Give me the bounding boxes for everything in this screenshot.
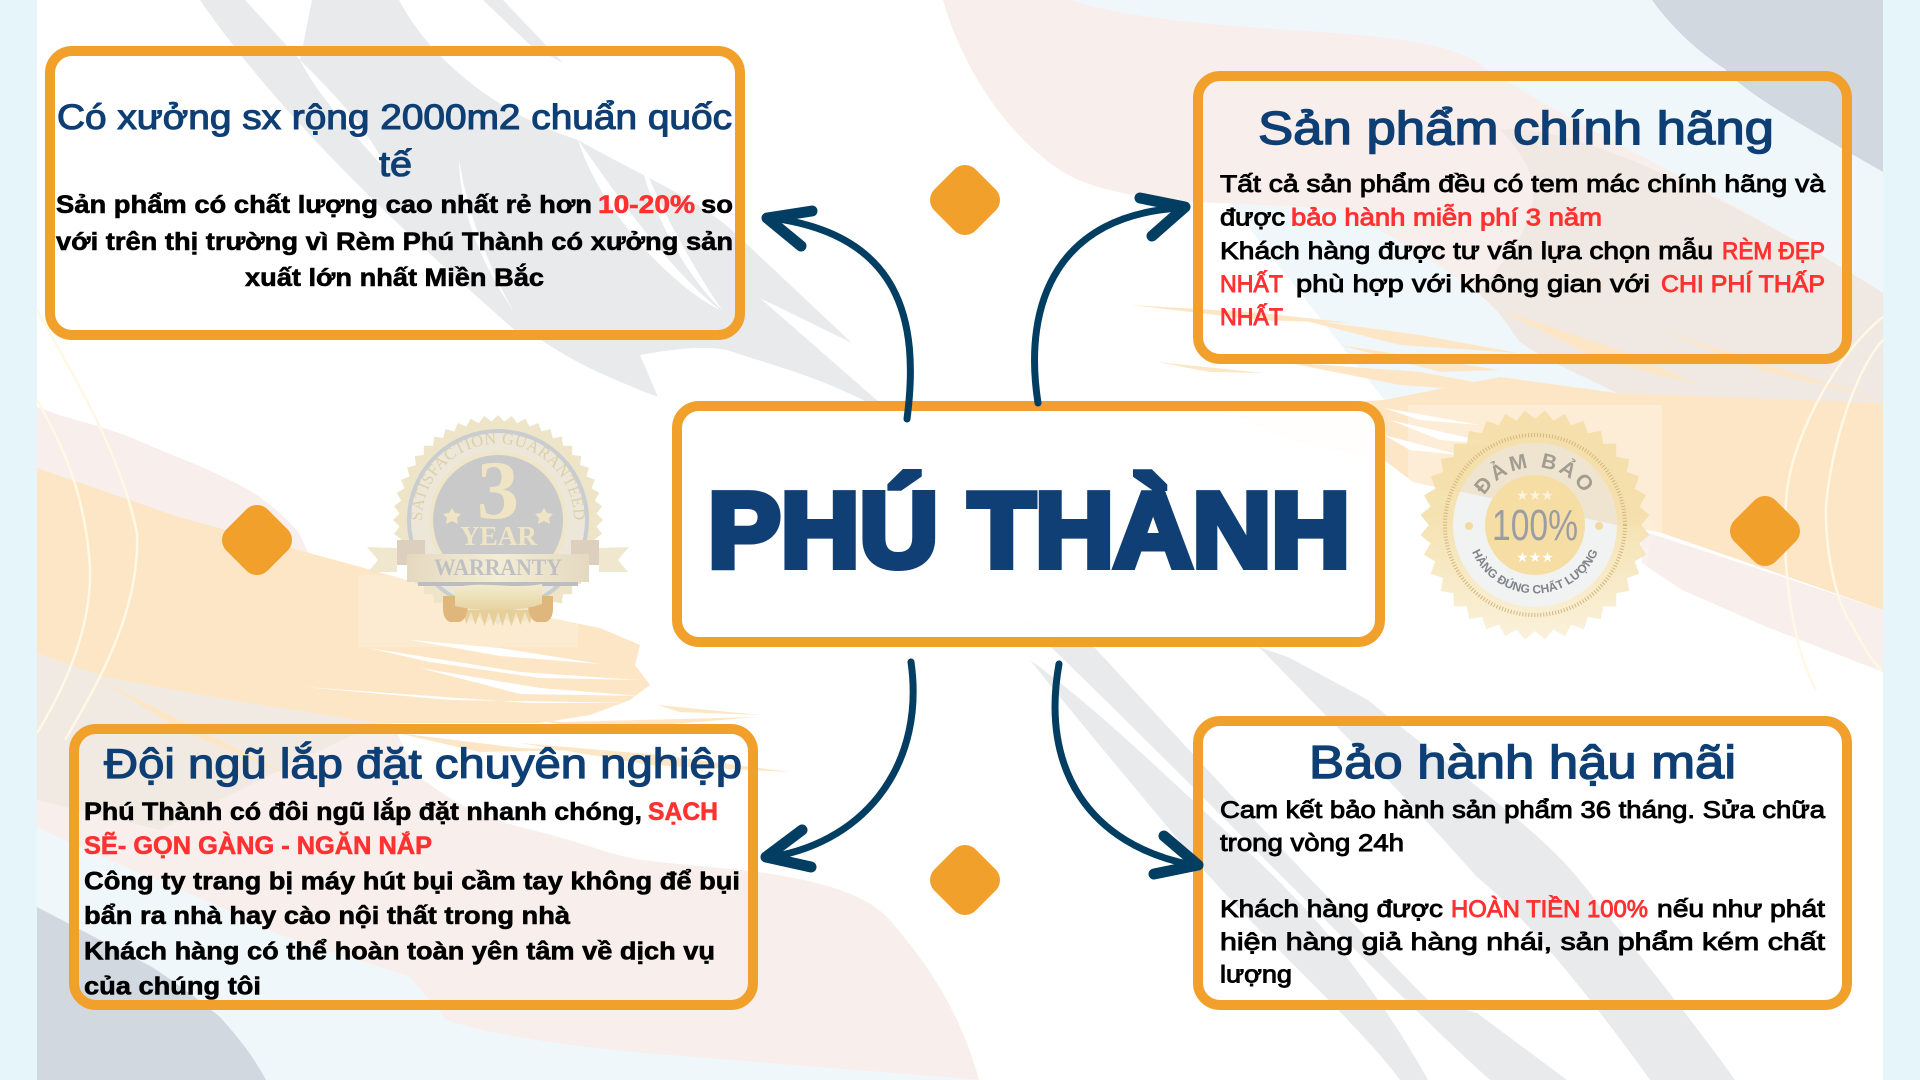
text: installation team description: Khách hàng có thể hoàn toàn yên tâm về dịch vụ xyxy=(84,938,715,966)
text: installation team description xyxy=(84,796,740,1000)
text: after-sales warranty description: trong vòng 24h xyxy=(1220,830,1404,857)
text: genuine products description: RÈM ĐẸP xyxy=(1722,238,1825,265)
badge: 100% quality seal: HÀNG ĐÚNG CHẤT LƯỢNG xyxy=(1472,549,1597,594)
text: after-sales warranty description: hiện hàng giả hàng nhái, sản phẩm kém chất xyxy=(1220,929,1825,956)
text: after-sales warranty description: lượng xyxy=(1220,962,1292,988)
text: genuine products description xyxy=(1220,171,1826,331)
text: factory description xyxy=(56,191,733,292)
text: factory description: Sản phẩm có chất lượng cao nhất rẻ hơn xyxy=(56,191,592,219)
heading: after-sales warranty: Bảo hành hậu mãi xyxy=(1309,736,1736,788)
decorative diamond: bottom xyxy=(945,860,985,900)
badge: 3 year warranty seal: SATISFACTION GUARANTEED xyxy=(411,432,585,520)
text: genuine products description: được xyxy=(1220,204,1285,232)
panel: factory xyxy=(50,51,740,335)
text: installation team description: của chúng tôi xyxy=(84,972,261,1000)
arrow: to installation team panel xyxy=(766,662,913,867)
panel: after-sales warranty xyxy=(1198,721,1847,1005)
text: genuine products description: bảo hành miễn phí 3 năm xyxy=(1291,204,1602,232)
text: factory description: xuất lớn nhất Miền Bắc xyxy=(245,262,544,292)
panel: installation team xyxy=(74,729,753,1005)
arrow: to after-sales warranty panel xyxy=(1055,664,1198,874)
title: PHÚ THÀNH: PHÚ THÀNH xyxy=(708,472,1350,590)
text: installation team description: bẩn ra nhà hay cào nội thất trong nhà xyxy=(84,902,570,930)
badge: 3 year warranty seal: WARRANTY xyxy=(434,555,562,580)
heading: installation team: Đội ngũ lắp đặt chuyên nghiệp xyxy=(104,740,742,787)
heading: factory: Có xưởng sx rộng 2000m2 chuẩn quốc xyxy=(57,98,732,137)
heading: factory xyxy=(57,98,732,184)
text: genuine products description: Khách hàng được tư vấn lựa chọn mẫu xyxy=(1220,238,1713,265)
text: after-sales warranty description xyxy=(1220,797,1826,988)
text: installation team description: SẠCH xyxy=(648,798,718,826)
badge: 100% quality seal xyxy=(1420,410,1650,640)
panel: center title xyxy=(677,406,1380,642)
badge: 100% quality seal: ★★★ xyxy=(1516,550,1554,566)
arrow: to factory panel xyxy=(767,211,910,419)
heading: factory: tế xyxy=(379,145,412,184)
badge: 3 year warranty seal: YEAR xyxy=(460,521,537,551)
text: genuine products description: phù hợp với không gian với xyxy=(1296,271,1650,298)
badge: 100% quality seal: ĐẢM BẢO xyxy=(1474,453,1592,494)
text: genuine products description: NHẤT xyxy=(1220,303,1283,331)
text: genuine products description: NHẤT xyxy=(1220,270,1283,298)
heading: genuine products: Sản phẩm chính hãng xyxy=(1258,102,1774,154)
badge: 100% quality seal: 100% xyxy=(1492,501,1578,550)
decorative diamond: right xyxy=(1745,511,1785,551)
badge: 3 year warranty seal: 3 xyxy=(477,444,519,537)
text: after-sales warranty description: nếu như phát xyxy=(1657,896,1825,923)
badge: 3 year warranty seal xyxy=(367,415,629,626)
text: after-sales warranty description: HOÀN TIỀN 100% xyxy=(1451,895,1648,923)
decorative diamond: top xyxy=(945,180,985,220)
badge: 100% quality seal: ★★★ xyxy=(1516,488,1554,504)
text: installation team description: Công ty trang bị máy hút bụi cầm tay không để bụi xyxy=(84,868,740,896)
text: factory description: với trên thị trường vì Rèm Phú Thành có xưởng sản xyxy=(56,228,733,256)
text: factory description: so xyxy=(701,191,733,219)
text: installation team description: SẼ- GỌN GÀNG - NGĂN NẮP xyxy=(84,830,432,860)
text: genuine products description: Tất cả sản phẩm đều có tem mác chính hãng và xyxy=(1220,171,1826,198)
text: genuine products description: CHI PHÍ THẤP xyxy=(1661,270,1825,298)
arrow: to genuine products panel xyxy=(1035,198,1185,403)
text: after-sales warranty description: Cam kết bảo hành sản phẩm 36 tháng. Sửa chữa xyxy=(1220,797,1826,824)
decorative diamond: left xyxy=(237,520,277,560)
text: after-sales warranty description: Khách hàng được xyxy=(1220,896,1443,923)
text: installation team description: Phú Thành có đôi ngũ lắp đặt nhanh chóng, xyxy=(84,796,642,826)
text: factory description: 10-20% xyxy=(598,191,695,219)
panel: genuine products xyxy=(1198,76,1847,359)
